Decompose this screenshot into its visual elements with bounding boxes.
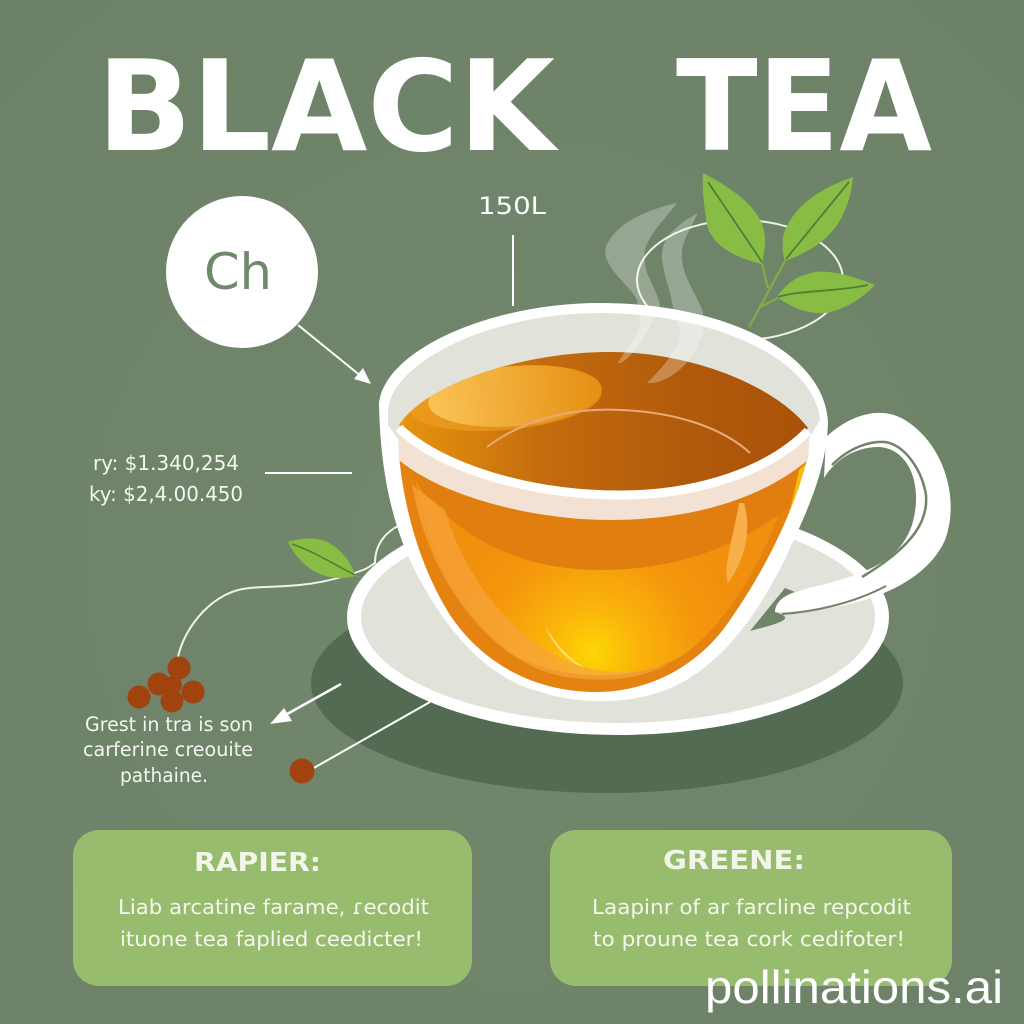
tea body xyxy=(400,460,806,692)
data text block: ry: $1.340,254 xyxy=(93,451,239,475)
tea leaves illustration xyxy=(637,173,875,340)
watermark: pollinations.ai xyxy=(705,961,1003,1013)
tea surface xyxy=(399,352,808,492)
data text block xyxy=(89,451,352,506)
panel: rapier: Liab arcatine farame, ɾecodit xyxy=(118,895,429,919)
surface ripple xyxy=(487,410,750,453)
connector and bead xyxy=(290,702,430,784)
tea beads xyxy=(128,656,204,712)
title: TEA xyxy=(676,33,932,180)
volume label xyxy=(478,192,547,306)
steam xyxy=(605,203,703,383)
arrow: badge to cup xyxy=(298,325,371,384)
caption text: carferine creouite xyxy=(83,738,253,761)
volume label: 150L xyxy=(478,192,547,220)
arrow to caption xyxy=(270,684,341,724)
caption text: pathaine. xyxy=(120,764,208,787)
caption text xyxy=(83,713,253,787)
saucer xyxy=(347,499,889,735)
panel: greene: to proune tea cork cedifoter! xyxy=(593,927,905,951)
panel: greene xyxy=(550,830,952,986)
panel: rapier: ituone tea faplied ceedicter! xyxy=(120,927,423,951)
panel: greene: GREENE: xyxy=(663,846,805,876)
panel: rapier xyxy=(73,830,472,986)
title xyxy=(97,33,932,180)
cup outer shell xyxy=(379,303,828,701)
rim band xyxy=(398,428,810,520)
caption text: Grest in tra is son xyxy=(85,713,253,736)
circle badge: Ch xyxy=(166,196,318,348)
small leaf xyxy=(288,538,363,578)
circle badge: Ch: Ch xyxy=(204,243,272,301)
connector curve xyxy=(178,525,400,657)
surface highlight xyxy=(410,365,602,431)
panel: greene: Laapinr of ar farcline repcodit xyxy=(592,895,911,919)
data text block: ky: $2,4.00.450 xyxy=(89,482,243,506)
saucer shadow xyxy=(311,573,903,793)
cup handle xyxy=(750,413,951,631)
cup interior xyxy=(388,313,820,440)
panel: rapier: RAPIER: xyxy=(194,848,321,878)
title: BLACK xyxy=(97,33,559,180)
cup xyxy=(379,303,828,701)
